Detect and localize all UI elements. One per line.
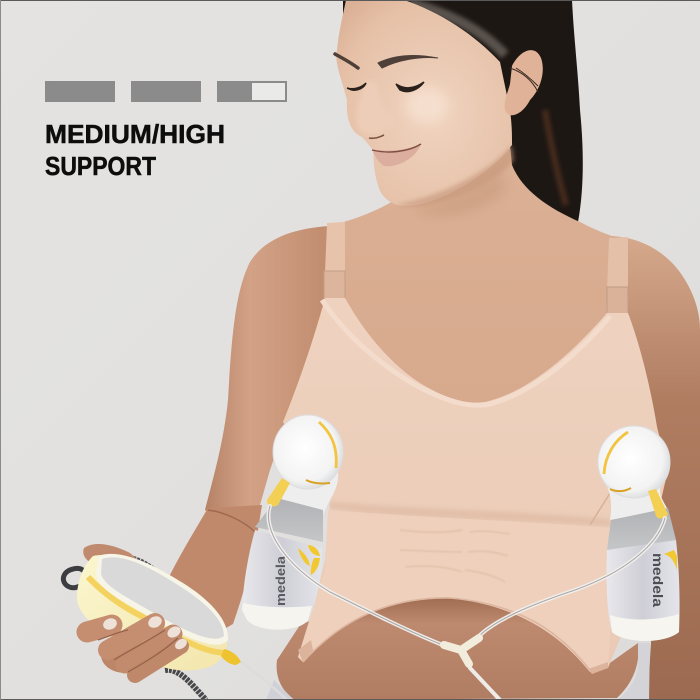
jaw shadow (397, 145, 514, 206)
output tube (241, 662, 286, 699)
left strap (324, 222, 345, 298)
finger shading (98, 630, 178, 672)
left medela text: medela (273, 555, 288, 606)
right bottle logo (664, 550, 677, 570)
hair ponytail (343, 0, 583, 222)
belly (277, 598, 638, 700)
bra cups (283, 298, 668, 672)
left upper arm and shoulder (205, 226, 332, 540)
stray hair over ear (510, 68, 538, 92)
nostril (369, 135, 384, 138)
grey cord behind (125, 557, 166, 582)
left pump (242, 415, 343, 630)
left bottle milk (242, 603, 312, 630)
left tube (268, 506, 445, 646)
left tube edge (268, 506, 445, 646)
left dome (273, 415, 343, 489)
left valve slot (306, 480, 330, 484)
under-bust band shadow (330, 502, 612, 526)
right valve slot (610, 488, 631, 491)
cheek highlight (405, 87, 449, 123)
nose shading (357, 80, 396, 134)
lower tube (470, 668, 500, 700)
right yellow valve (648, 489, 668, 518)
yellow band (88, 577, 224, 653)
fingernails (102, 614, 189, 651)
neck shadow (410, 170, 506, 216)
elbow crease (208, 510, 255, 532)
cup side seam (590, 490, 612, 525)
bar 3 partly filled (217, 81, 287, 102)
woman's body (150, 125, 700, 700)
lip line (372, 144, 421, 152)
face and ear (335, 0, 543, 206)
thumb behind (83, 544, 150, 570)
neckline trim (322, 300, 610, 405)
tubing and Y connector (268, 506, 665, 700)
right pump neck (604, 475, 668, 520)
right strap clip (607, 287, 628, 315)
bar 2 (131, 81, 201, 102)
lips (372, 144, 421, 166)
grey panel (101, 557, 224, 639)
device face rim (96, 554, 228, 645)
right tube edge (478, 518, 665, 637)
neck and chest skin (250, 125, 668, 450)
right dome (598, 426, 670, 498)
right strap (606, 237, 628, 315)
left bottle logo (298, 545, 320, 575)
band (298, 510, 612, 672)
heading line 2: SUPPORT (45, 153, 156, 181)
right tip (588, 662, 608, 674)
right medela text: medela (650, 553, 665, 608)
right eye lashes (396, 82, 424, 92)
control unit in hand (63, 544, 286, 700)
fingers (87, 623, 181, 675)
shorts at right hip (617, 643, 650, 700)
shorts at left hip (266, 680, 294, 700)
left eyebrow (335, 54, 358, 68)
band lower hem (303, 598, 608, 670)
heading (45, 121, 225, 181)
band gathered folds (400, 530, 510, 582)
palm (101, 637, 149, 673)
left bottle (242, 530, 322, 630)
left forearm (150, 505, 262, 640)
right pump (598, 426, 680, 641)
right bottle milk (610, 614, 679, 641)
left dome arc (319, 422, 336, 468)
device shell (77, 555, 227, 670)
bra (283, 222, 668, 674)
bar 1 (45, 81, 115, 102)
right bottle (607, 540, 680, 641)
right eyebrow (378, 56, 438, 68)
left collar (255, 498, 323, 542)
left pump neck (277, 470, 338, 515)
yellow plug (221, 649, 241, 665)
cord below (165, 670, 206, 700)
right collar (607, 508, 676, 550)
left strap clip (324, 271, 345, 299)
charcoal loop (63, 568, 86, 588)
support level meter (45, 81, 287, 102)
ear (505, 50, 543, 115)
left yellow valve (267, 478, 290, 506)
Y connector (444, 638, 479, 664)
right dome arc (604, 432, 628, 474)
right tube (478, 518, 665, 637)
right arm and shoulder (612, 236, 700, 700)
left eye lashes (347, 83, 366, 90)
left tip (298, 640, 313, 662)
heading line 1: MEDIUM/HIGH (45, 121, 225, 149)
